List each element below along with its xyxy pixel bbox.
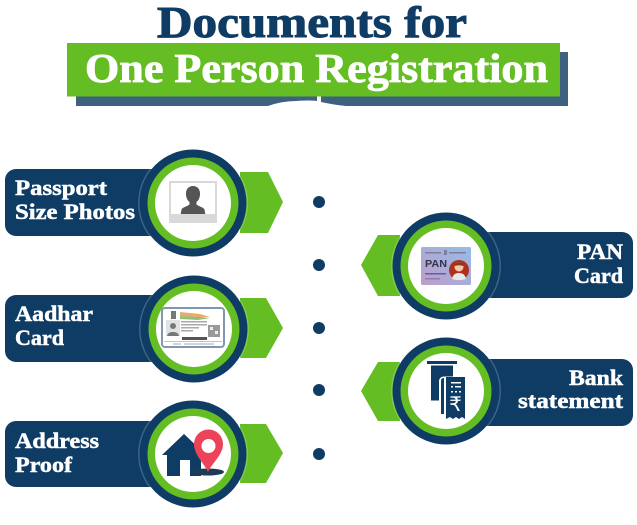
icon: portrait photo [169, 181, 217, 223]
panel: Aadhar Card [5, 274, 283, 384]
label: Passport Size Photos [15, 175, 135, 224]
label: Bank statement: statement [518, 388, 624, 413]
title banner [67, 43, 568, 106]
panel: Bank statement [361, 336, 633, 446]
panel: PAN Card [361, 211, 633, 321]
label: Bank statement: Bank [569, 365, 624, 390]
panel: Passport Size Photos [5, 148, 283, 258]
icon: Aadhaar card [162, 308, 224, 347]
label: Address Proof [15, 428, 99, 477]
dotted connector column [313, 196, 325, 460]
label: PAN Card: Card [574, 263, 623, 288]
icon: house with location pin [162, 430, 224, 476]
label: Address Proof: Address [15, 428, 99, 453]
label: Address Proof: Proof [15, 452, 73, 477]
icon: rupee receipts: ₹ [449, 392, 462, 416]
icon: rupee receipts [427, 361, 465, 419]
label: PAN Card: PAN [577, 239, 623, 264]
label: Aadhar Card: Card [15, 325, 64, 350]
panel: Address Proof [5, 399, 283, 509]
title banner: One Person Registration [85, 45, 548, 91]
icon: PAN card: PAN [425, 259, 447, 270]
label: Passport Size Photos: Size Photos [15, 199, 135, 224]
icon: PAN card [421, 247, 471, 285]
label: Passport Size Photos: Passport [15, 175, 108, 200]
label: Aadhar Card: Aadhar [15, 301, 93, 326]
label: Aadhar Card [15, 301, 93, 350]
label: PAN Card [574, 239, 623, 288]
label: Bank statement [518, 365, 624, 413]
